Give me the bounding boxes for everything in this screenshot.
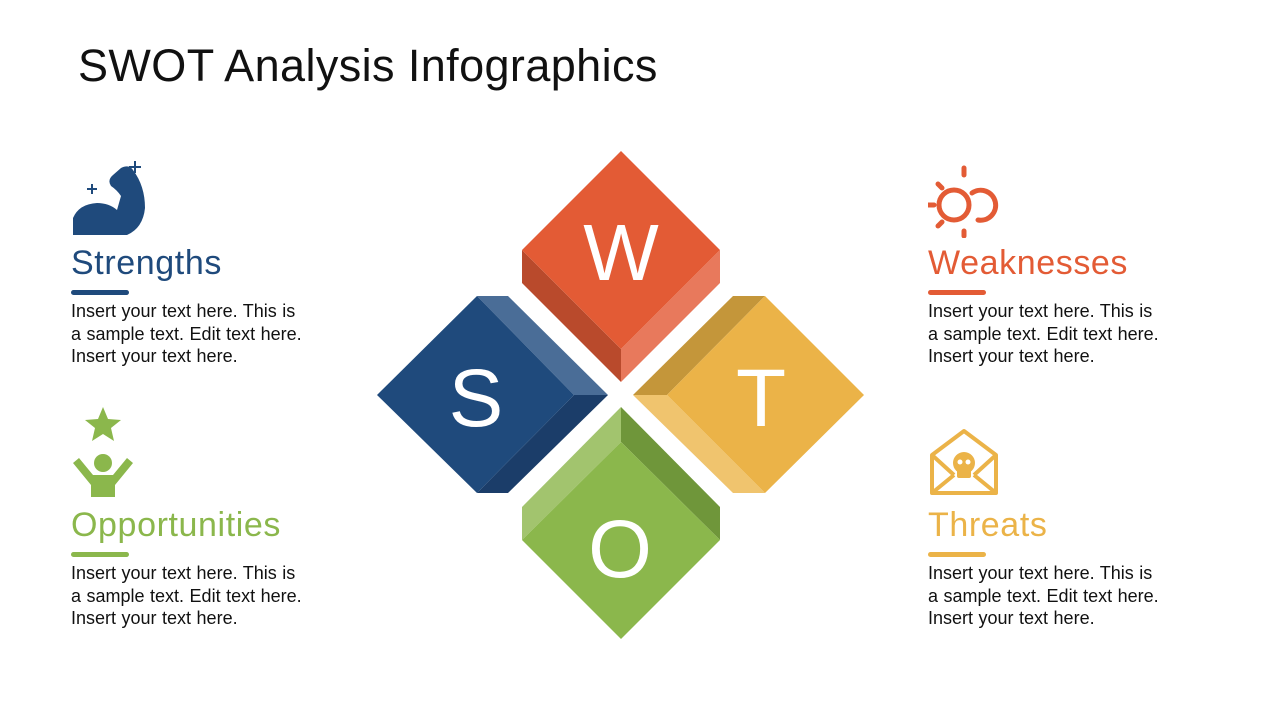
icon: flexed arm	[73, 161, 145, 235]
icon: rings with rays	[928, 166, 998, 238]
panel: opportunities	[71, 407, 302, 628]
body text: Insert your text here.	[71, 608, 238, 628]
panel: strengths	[71, 161, 302, 366]
body text: a sample text. Edit text here.	[928, 324, 1159, 344]
body text: Insert your text here.	[928, 608, 1095, 628]
body text: Insert your text here. This is	[928, 563, 1152, 583]
body text: a sample text. Edit text here.	[71, 324, 302, 344]
body text: Insert your text here. This is	[71, 563, 295, 583]
block: T	[633, 296, 864, 493]
heading: Strengths	[71, 244, 222, 282]
body text: Insert your text here.	[928, 346, 1095, 366]
block: S: S	[449, 353, 503, 444]
body text	[71, 301, 302, 366]
body text	[928, 563, 1159, 628]
heading: Threats	[928, 506, 1047, 544]
icon: person with star	[73, 407, 133, 497]
body text: a sample text. Edit text here.	[71, 586, 302, 606]
heading: Weaknesses	[928, 244, 1128, 282]
block: O	[522, 407, 720, 639]
panel: weaknesses	[928, 166, 1159, 366]
icon: envelope with skull	[930, 429, 998, 495]
body text: Insert your text here.	[71, 346, 238, 366]
heading: Opportunities	[71, 506, 281, 544]
block: S	[377, 296, 608, 493]
block: W	[522, 151, 720, 382]
body text: Insert your text here. This is	[71, 301, 295, 321]
title: SWOT Analysis Infographics	[78, 40, 658, 91]
body text: Insert your text here. This is	[928, 301, 1152, 321]
block: W: W	[583, 208, 659, 297]
body text	[928, 301, 1159, 366]
block: O: O	[588, 504, 652, 595]
panel: threats	[928, 429, 1159, 628]
body text: a sample text. Edit text here.	[928, 586, 1159, 606]
body text	[71, 563, 302, 628]
block: T: T	[736, 353, 786, 444]
